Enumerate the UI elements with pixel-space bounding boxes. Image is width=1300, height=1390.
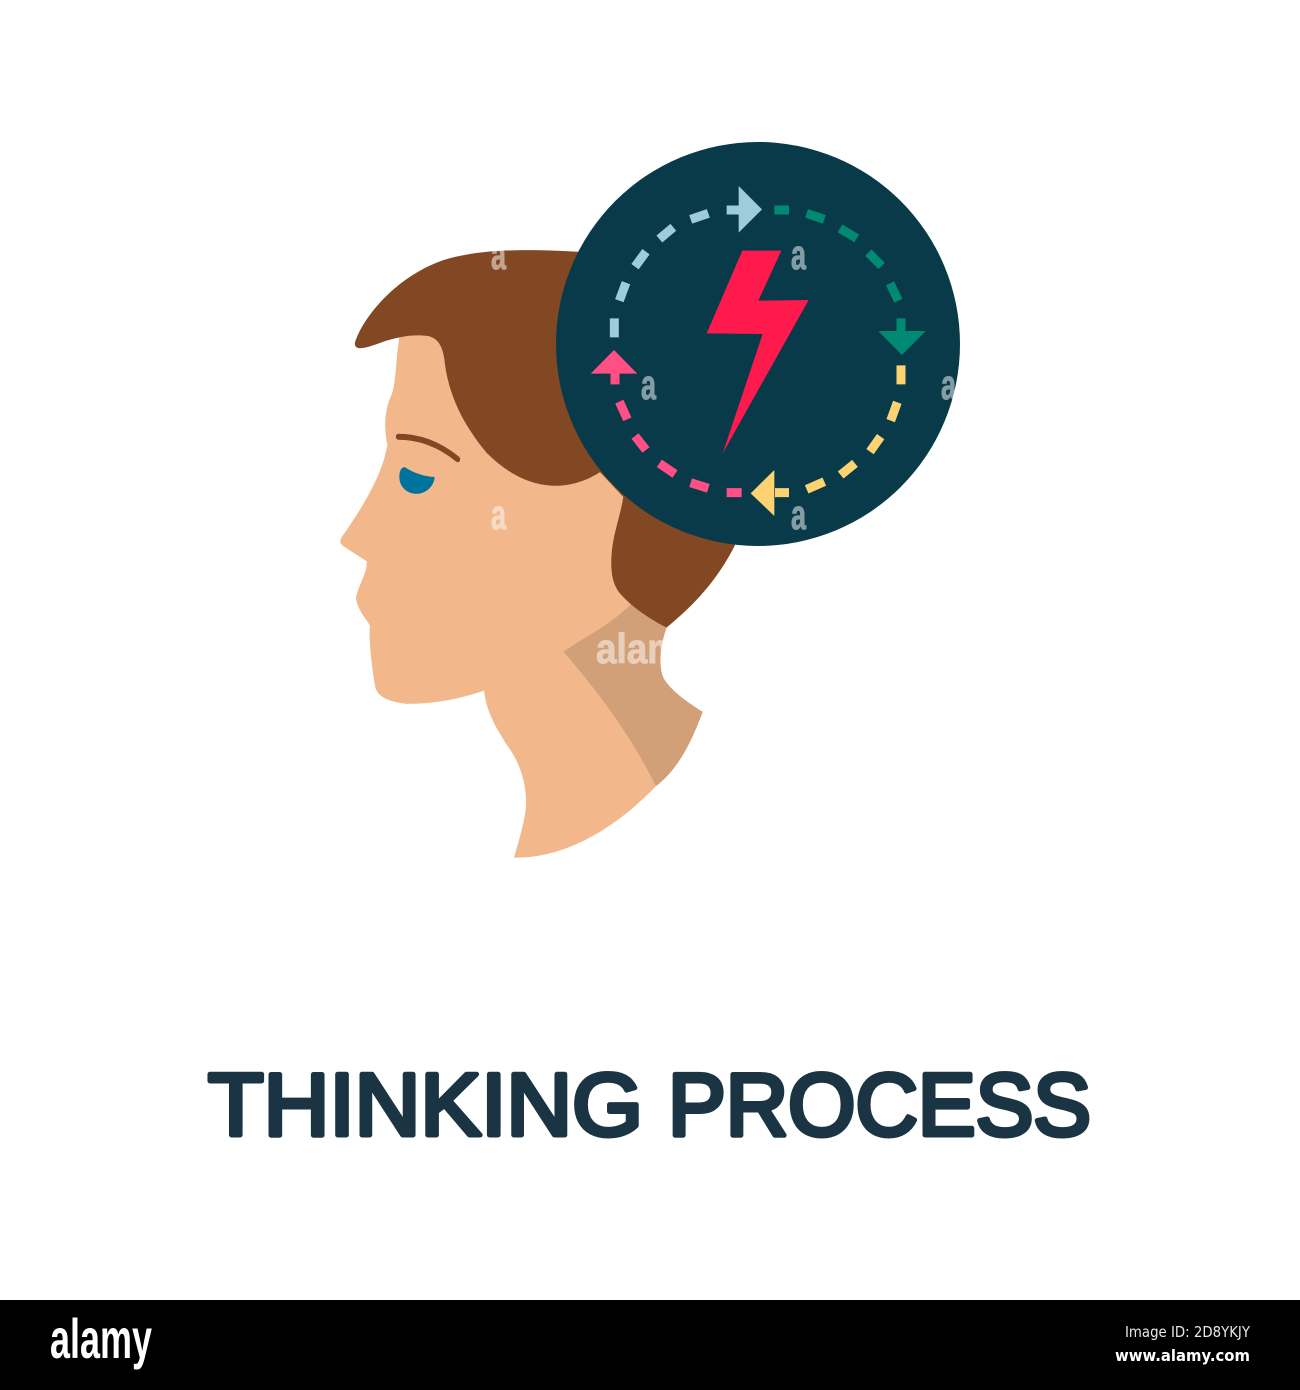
yellow dashed arc and arrow xyxy=(751,365,901,516)
title: PROCESS xyxy=(668,1055,1091,1154)
eyebrow xyxy=(398,437,458,459)
watermark letters: a xyxy=(641,361,656,408)
neck shadow xyxy=(563,603,703,786)
green dashed arc and arrow xyxy=(774,210,926,355)
image id: Image ID: 2D8YKJY xyxy=(1125,1323,1251,1341)
face and neck xyxy=(340,280,703,858)
alamy logo: alamy xyxy=(50,1307,152,1370)
thought circle xyxy=(556,142,960,546)
title: THINKING xyxy=(208,1055,643,1154)
black strip xyxy=(0,1300,1300,1390)
pink dashed arc and arrow xyxy=(591,350,742,493)
eye xyxy=(399,467,435,494)
dark circle background xyxy=(556,142,960,546)
illustration: head in profile xyxy=(340,250,735,858)
blue dashed arc and arrow xyxy=(614,186,762,337)
watermark letters: a xyxy=(791,491,806,538)
watermark letters xyxy=(491,231,956,672)
watermark letters: a xyxy=(491,231,506,278)
hair xyxy=(355,250,735,628)
watermark letters: alam xyxy=(596,625,680,672)
watermark letters: a xyxy=(791,231,806,278)
footer bar xyxy=(0,1300,1300,1390)
website: www.alamy.com xyxy=(1115,1346,1250,1365)
watermark letters: a xyxy=(491,491,506,538)
watermark letters: a xyxy=(941,361,956,408)
lightning bolt xyxy=(707,251,809,453)
